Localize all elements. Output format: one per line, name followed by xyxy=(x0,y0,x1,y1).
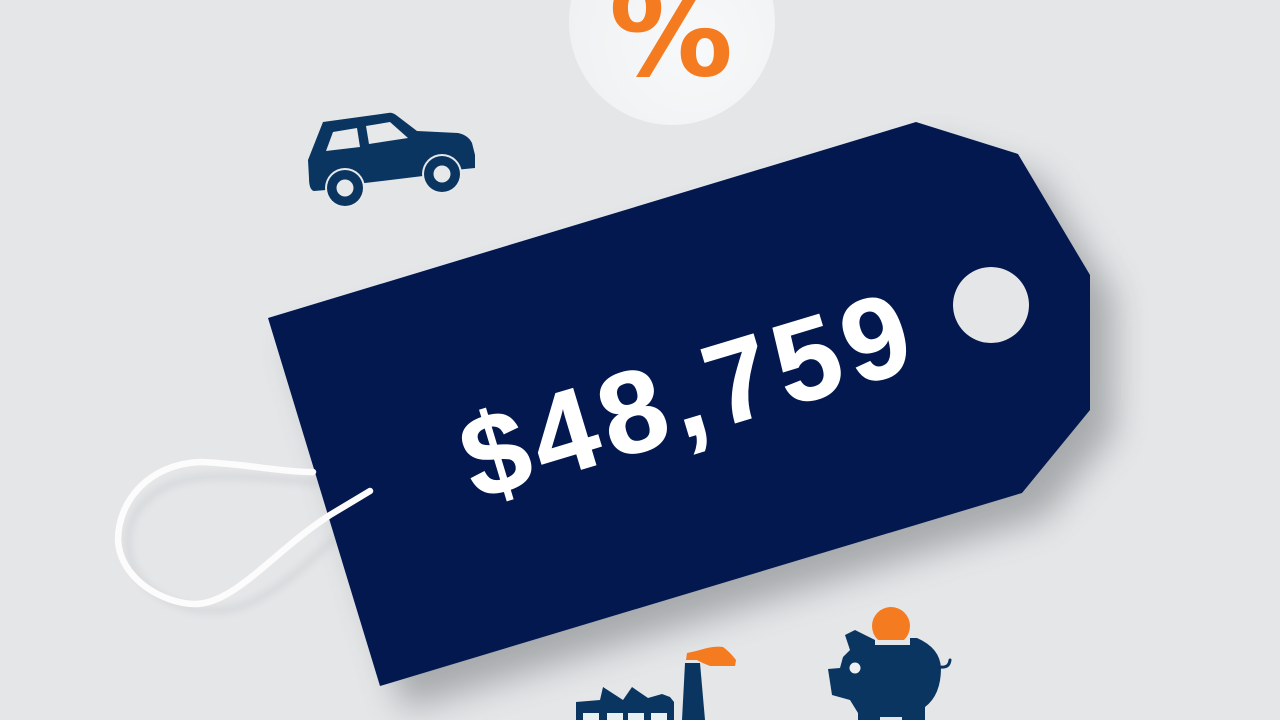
string loop xyxy=(118,462,370,604)
price tag illustration xyxy=(114,0,1132,720)
percent badge xyxy=(569,0,775,125)
icon: piggy bank xyxy=(828,607,950,720)
tag shadow xyxy=(292,146,1114,710)
price tag body xyxy=(268,122,1090,686)
price label: $48,759 xyxy=(446,265,932,525)
string shadow xyxy=(128,476,355,611)
icon: factory xyxy=(576,647,736,720)
icon: car xyxy=(308,113,475,208)
smoke xyxy=(686,647,736,666)
